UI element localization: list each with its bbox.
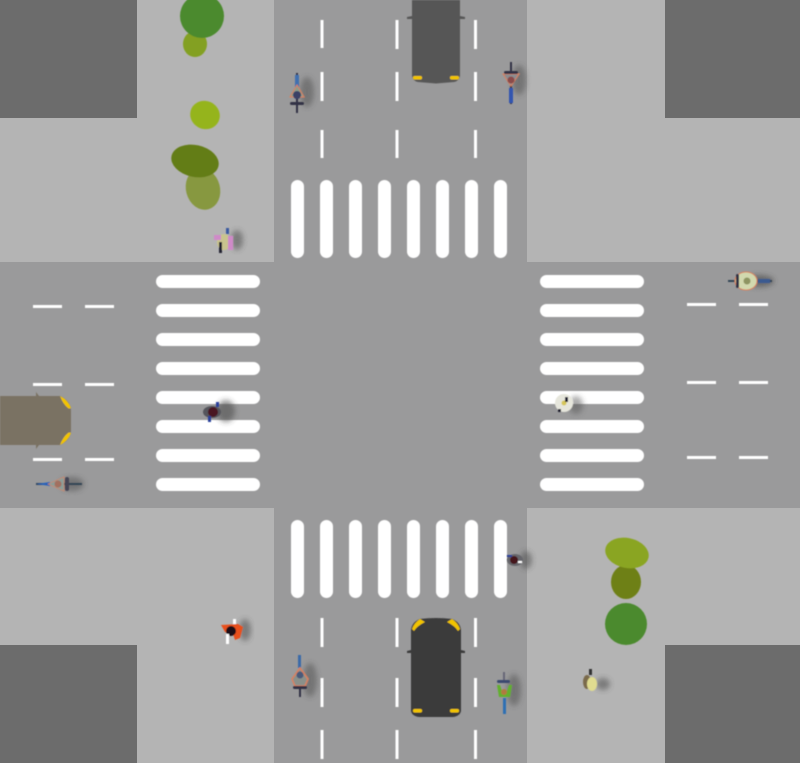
crossing: south <box>291 520 507 598</box>
pedestrian: northwest, pink <box>214 228 243 253</box>
cyclist: south lane, left <box>292 655 317 697</box>
pedestrian: southeast, cream <box>583 669 610 691</box>
car: west, brown <box>0 392 71 449</box>
crossing: north <box>291 180 507 258</box>
cyclist: west lane <box>36 477 84 491</box>
crossing: east <box>540 275 644 491</box>
trees: southeast <box>602 534 652 645</box>
trees: northwest <box>168 0 225 214</box>
crossing: west <box>156 275 260 491</box>
car: north, dark grey <box>407 0 465 84</box>
cyclist: east lane <box>728 272 774 290</box>
cyclist: north lane, left <box>290 73 314 113</box>
cyclist: south lane, right <box>497 672 521 714</box>
pedestrian: south sidewalk corner <box>507 551 532 569</box>
car: south, black <box>407 618 465 717</box>
pedestrian: west crossing <box>203 400 235 422</box>
cyclist: north lane, right <box>503 62 526 104</box>
lane markings: east <box>687 303 768 459</box>
lane markings: south <box>320 618 477 759</box>
lane markings: north <box>320 20 477 158</box>
pedestrian: southwest, red <box>221 619 251 644</box>
pedestrian: east crossing <box>555 394 583 414</box>
lane markings: west <box>33 305 114 461</box>
